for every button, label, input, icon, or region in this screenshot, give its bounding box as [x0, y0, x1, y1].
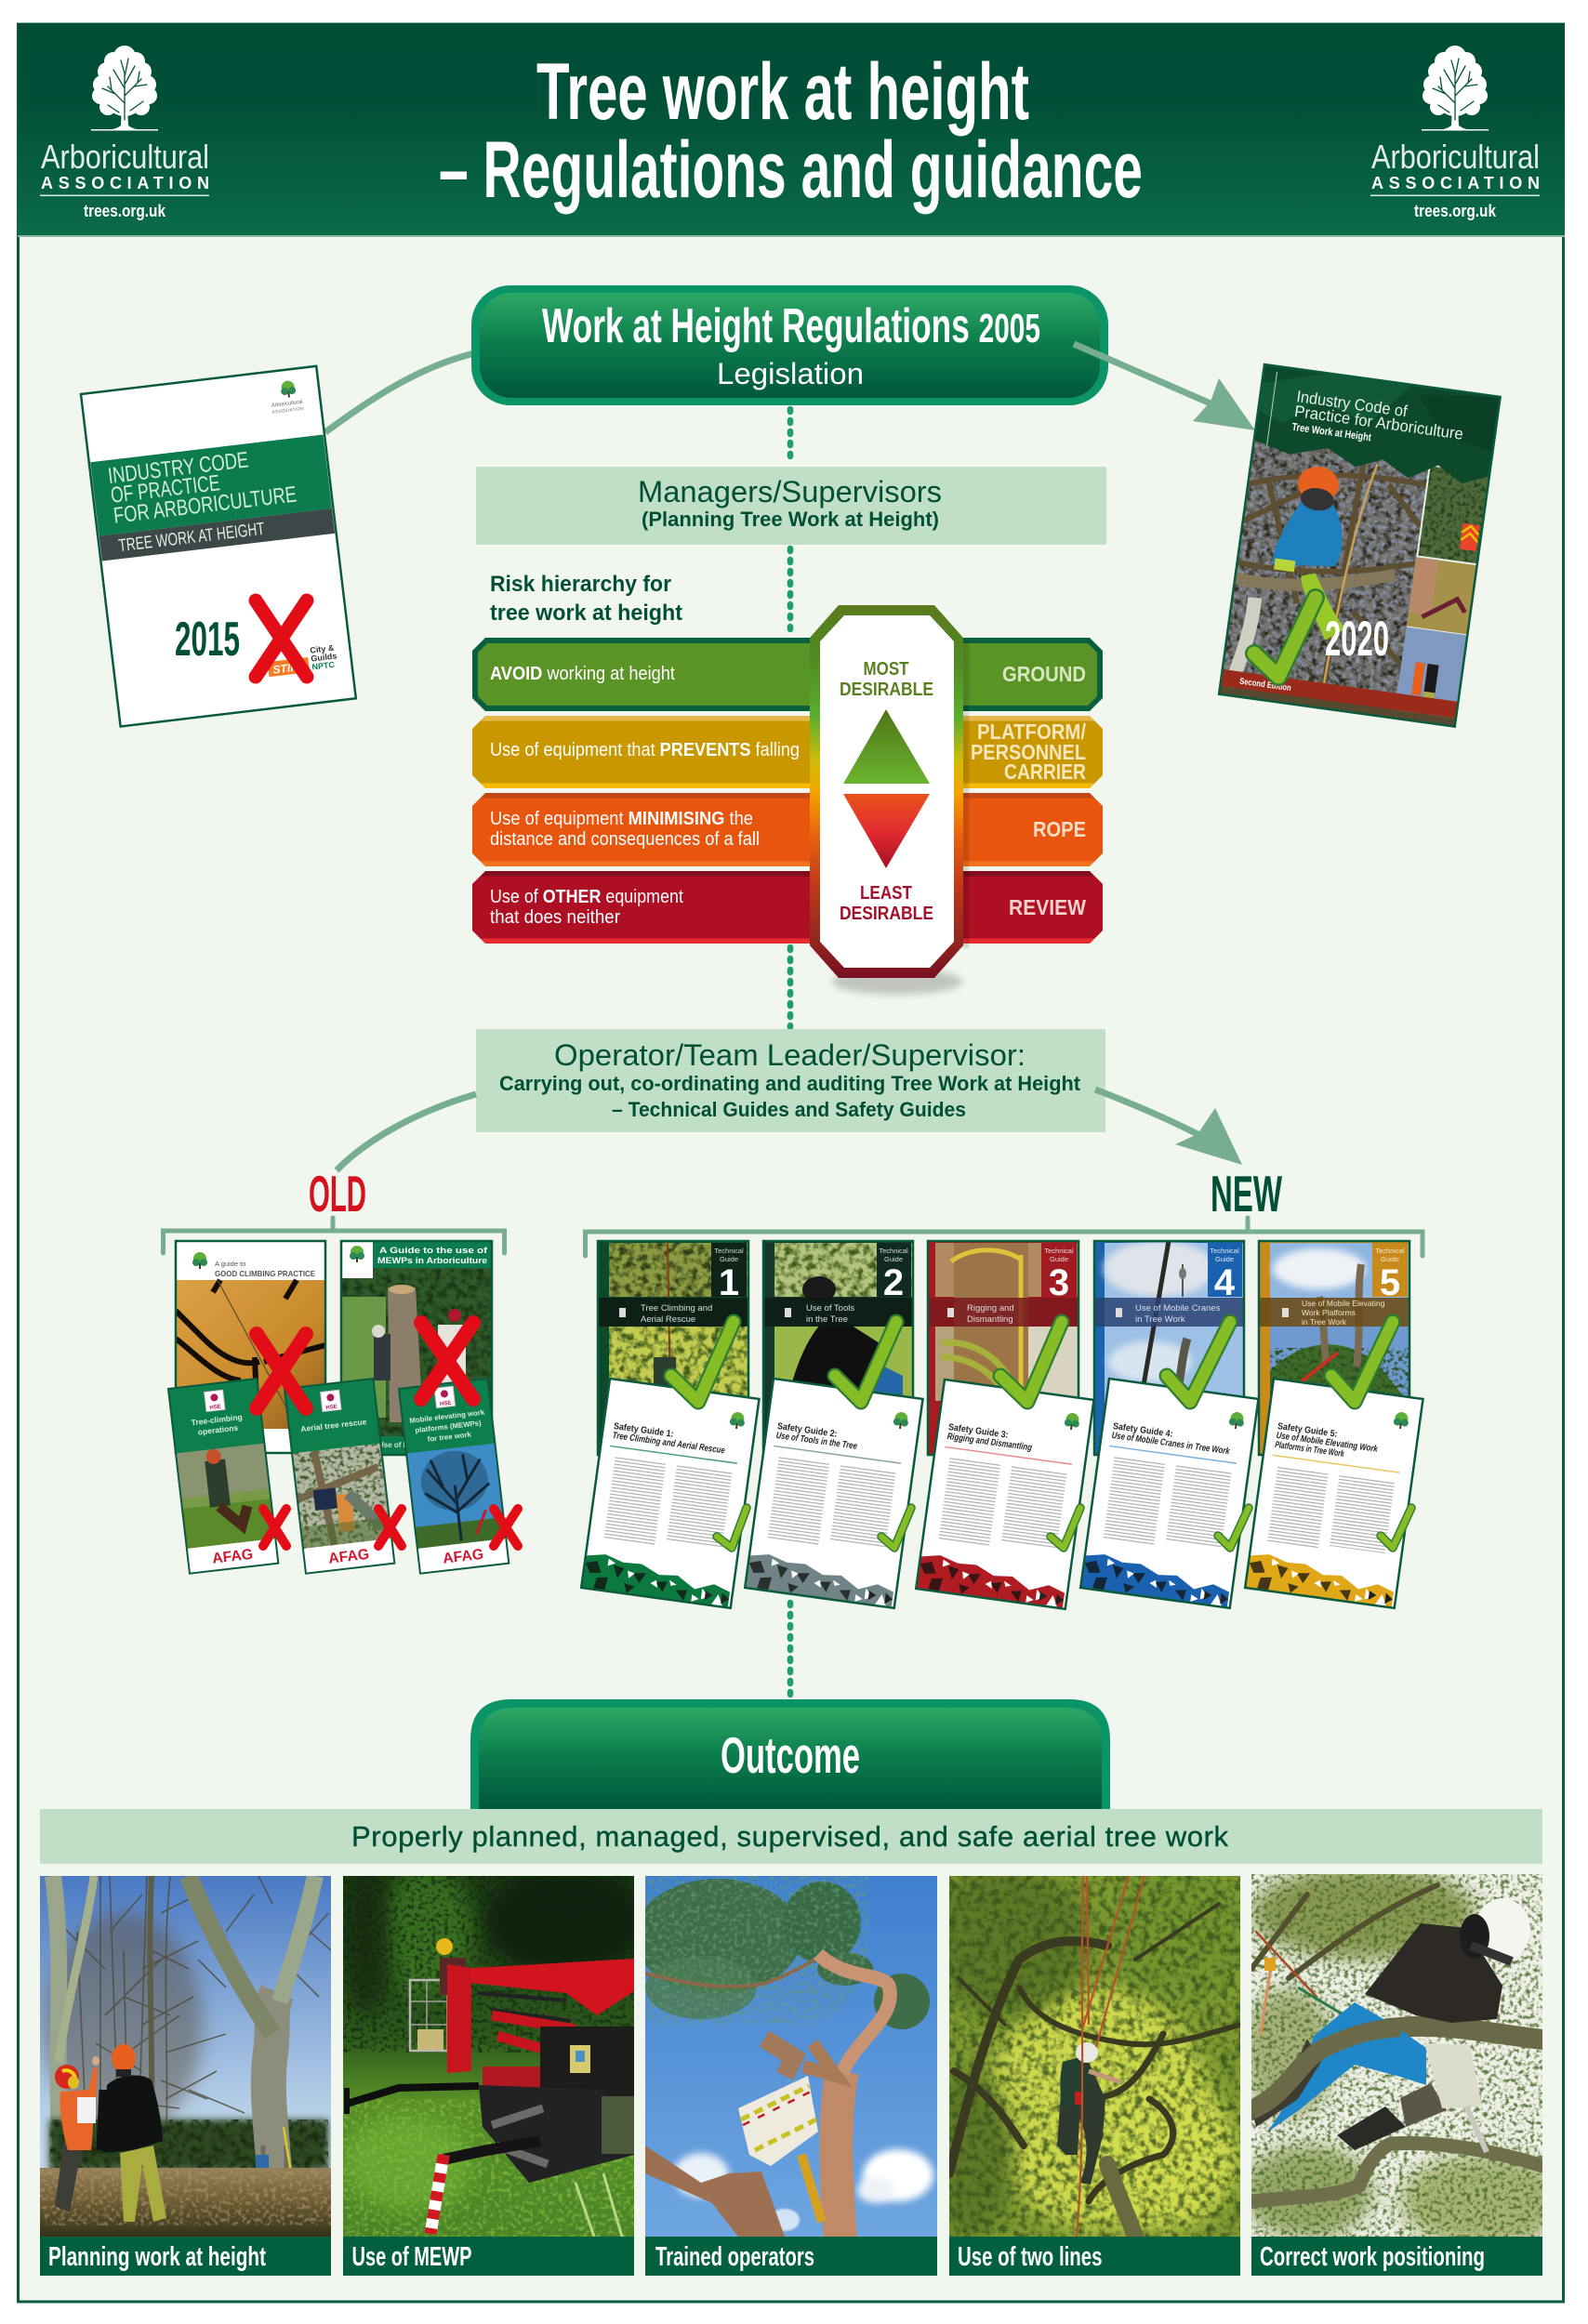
document: 2015 code of practice (old): STIHL — [272, 660, 306, 677]
cover: technical guide 2: 2 — [883, 1262, 904, 1303]
cover: technical guide 3: Guide — [1050, 1255, 1068, 1263]
panel: operator / team leader: – Technical Guides and Safety Guides — [612, 1098, 966, 1121]
cover: technical guide 3: Dismantling — [967, 1314, 1013, 1325]
cover: technical guide 2: Guide — [884, 1255, 903, 1263]
document: 2020 code of practice (current): Second Edition — [1238, 677, 1292, 693]
caption: Correct work positioning — [1260, 2242, 1485, 2272]
bracket: old — [164, 1218, 504, 1253]
sheet: safety guide 5: Platforms in Tree Work — [1275, 1440, 1345, 1459]
bar: minimising / rope: ROPE — [1033, 817, 1086, 841]
brochure: tree-climbing operations: HSE — [209, 1405, 221, 1411]
brochure: mobile elevating work platforms: AFAG — [442, 1547, 484, 1567]
caption: Use of two lines — [958, 2242, 1103, 2272]
cover: technical guide 2: Use of Tools — [806, 1303, 854, 1314]
group: new technical guides — [598, 1241, 1409, 1455]
caption — [645, 2237, 937, 2276]
bar: prevents falling / platform: PLATFORM/ — [977, 720, 1087, 744]
caption — [949, 2237, 1240, 2276]
sheet: safety guide 1 — [581, 1379, 760, 1608]
capsule: most to least desirable scale: DESIRABLE — [840, 680, 933, 700]
panel: managers / supervisors — [476, 467, 1106, 545]
cover: technical guide 1 — [598, 1241, 748, 1455]
brochure: mobile elevating work platforms: for tree work — [427, 1430, 472, 1444]
cover: technical guide 4 — [1094, 1241, 1244, 1455]
brochure: mobile elevating work platforms — [399, 1379, 509, 1574]
brochure: aerial tree rescue: Aerial tree rescue — [300, 1417, 367, 1433]
icons: small green ticks on safety guides — [717, 1508, 1411, 1548]
sheet: safety guide 5: Use of Mobile Elevating Work — [1276, 1431, 1379, 1455]
caption — [343, 2237, 634, 2276]
sheet: safety guide 3: Safety Guide 3: — [947, 1422, 1009, 1441]
document: 2015 code of practice (old): TREE WORK AT HEIGHT — [117, 520, 266, 556]
sheet: safety guide 1: Tree Climbing and Aerial Rescue — [612, 1431, 726, 1456]
cover: technical guide 5: Work Platforms — [1302, 1308, 1356, 1317]
capsule: most to least desirable scale — [810, 605, 969, 995]
cover: technical guide 1: Aerial Rescue — [641, 1314, 695, 1325]
cover: technical guide 1: 1 — [719, 1262, 739, 1303]
cover: technical guide 4: Technical — [1210, 1247, 1239, 1255]
capsule: most to least desirable scale: LEAST — [860, 883, 912, 904]
outcome statement bar: Properly planned, managed, supervised, and safe aerial tree work — [351, 1820, 1229, 1853]
group: old guidance documents — [168, 1241, 518, 1574]
doc: a guide to good climbing practice — [176, 1241, 325, 1453]
panel: legislation — [471, 285, 1108, 405]
bar: prevents falling / platform: PERSONNEL — [971, 740, 1086, 764]
cover: technical guide 3 — [928, 1241, 1079, 1455]
bracket: new — [586, 1218, 1423, 1256]
bar: minimising / rope — [472, 793, 1103, 866]
cover: technical guide 4: Guide — [1215, 1255, 1234, 1263]
icon: red crosses on old guides — [257, 1323, 473, 1408]
heading: risk hierarchy: tree work at height — [490, 601, 682, 626]
cover: technical guide 5: Technical — [1375, 1247, 1405, 1255]
document: 2015 code of practice (old): Guilds — [311, 651, 337, 664]
sheet: safety guide 5: Safety Guide 5: — [1277, 1421, 1338, 1440]
document: 2015 code of practice (old): NPTC — [311, 660, 336, 672]
bar: prevents falling / platform: CARRIER — [1004, 759, 1086, 784]
panel: outcome — [470, 1699, 1110, 1809]
sheet: safety guide 5 — [1245, 1379, 1423, 1608]
header band — [18, 23, 1565, 237]
capsule: most to least desirable scale: MOST — [863, 659, 909, 680]
document: 2020 code of practice (current): Industry Code of — [1295, 387, 1409, 420]
doc: a guide to the use of MEWPs: MEWPs in Arboriculture — [377, 1256, 487, 1266]
brochure: tree-climbing operations: operations — [197, 1423, 239, 1437]
cover: technical guide 3: Rigging and — [967, 1303, 1014, 1314]
cover: technical guide 5: Guide — [1381, 1255, 1399, 1263]
logo: Arboricultural Association left: ASSOCIATION — [41, 174, 209, 192]
bar: other equipment / review: that does neither — [490, 907, 620, 928]
sheet: safety guide 2 — [745, 1379, 923, 1608]
sheet: safety guide 3: Rigging and Dismantling — [946, 1432, 1033, 1453]
document: 2015 code of practice (old): Arboricultural — [271, 400, 303, 409]
capsule: most to least desirable scale: DESIRABLE — [840, 904, 933, 924]
arrow to new guidance — [1095, 1089, 1242, 1165]
logo: Arboricultural Association right: trees.org.uk — [1414, 202, 1497, 220]
dotted flow line — [787, 409, 793, 1697]
logo: Arboricultural Association right — [1370, 46, 1540, 220]
cover: technical guide 5 — [1259, 1241, 1409, 1455]
icon: red cross on 2015 — [256, 601, 307, 677]
title: Tree work at height — [536, 47, 1029, 137]
panel: legislation: Work at Height Regulations 2005 — [542, 299, 1040, 353]
panel: operator / team leader: Carrying out, co-ordinating and auditing Tree Work at Height — [499, 1072, 1081, 1095]
sheet: safety guide 1: Safety Guide 1: — [613, 1421, 674, 1440]
cover: technical guide 5: 5 — [1380, 1262, 1400, 1303]
bar: other equipment / review: Use of OTHER equipment — [490, 887, 683, 907]
document: 2015 code of practice (old): FOR ARBORICULTURE — [112, 482, 298, 529]
year label 2015: 2015 — [175, 613, 240, 667]
panel: operator / team leader — [476, 1029, 1105, 1132]
sheet: safety guide 4: Safety Guide 4: — [1112, 1421, 1173, 1440]
title: – Regulations and guidance — [439, 125, 1143, 215]
document: 2020 code of practice (current): Practice for Arboriculture — [1293, 402, 1464, 443]
icon: up triangle — [843, 709, 930, 784]
photo: planning work at height — [40, 1876, 331, 2276]
outcome statement bar — [40, 1809, 1542, 1864]
brochure: aerial tree rescue — [285, 1379, 394, 1574]
heading: risk hierarchy: Risk hierarchy for — [490, 572, 671, 597]
brochure: aerial tree rescue: HSE — [325, 1405, 337, 1411]
cover: technical guide 3: Technical — [1044, 1247, 1074, 1255]
icon: down triangle — [843, 794, 930, 868]
cover: technical guide 4: in Tree Work — [1135, 1314, 1185, 1325]
bar: other equipment / review: REVIEW — [1009, 895, 1086, 919]
arrow to 2020 code of practice — [1074, 344, 1255, 430]
panel: legislation: Legislation — [717, 357, 864, 390]
panel: outcome: Outcome — [721, 1726, 860, 1784]
sheet: safety guide 2: Safety Guide 2: — [776, 1421, 838, 1440]
group: new safety guides — [581, 1322, 1423, 1609]
photo: trained operators — [634, 1876, 937, 2276]
brochure: tree-climbing operations: Tree-climbing — [191, 1412, 243, 1427]
icons: small red crosses — [263, 1509, 518, 1546]
document: 2015 code of practice (old): OF PRACTICE — [110, 470, 221, 508]
cover: technical guide 2: Technical — [879, 1247, 908, 1255]
cover: technical guide 2: in the Tree — [806, 1314, 848, 1325]
sheet: safety guide 2: Use of Tools in the Tree — [775, 1431, 858, 1452]
cover: technical guide 5: in Tree Work — [1302, 1317, 1347, 1327]
cover: technical guide 4: Use of Mobile Cranes — [1135, 1303, 1221, 1314]
cover: technical guide 5: Use of Mobile Elevating — [1302, 1299, 1385, 1308]
heading: risk hierarchy — [490, 572, 682, 626]
document: 2020 code of practice (current) — [1219, 364, 1501, 727]
cover: technical guide 4: 4 — [1214, 1262, 1236, 1303]
doc: a guide to the use of MEWPs — [341, 1241, 492, 1455]
bar: avoid / ground: AVOID working at height — [490, 664, 675, 684]
cover: technical guide 1: Tree Climbing and — [641, 1303, 712, 1314]
bar: avoid / ground: GROUND — [1002, 662, 1086, 686]
logo: Arboricultural Association left: Arboricultural — [41, 138, 209, 176]
brochure: mobile elevating work platforms: platforms (MEWPs) — [415, 1419, 482, 1434]
document: 2020 code of practice (current): Tree Work at Height — [1291, 422, 1372, 443]
brochure: tree-climbing operations: AFAG — [211, 1547, 254, 1567]
icon: green tick on 2020 — [1254, 598, 1316, 677]
doc: a guide to good climbing practice: GOOD CLIMBING PRACTICE — [215, 1269, 315, 1278]
photo: correct work positioning — [1242, 1867, 1568, 2276]
connector to old guidance — [337, 1094, 476, 1170]
caption: Planning work at height — [48, 2242, 266, 2272]
sheet: safety guide 4 — [1080, 1379, 1259, 1608]
doc: a guide to good climbing practice: A guide to — [215, 1260, 245, 1268]
logo: Arboricultural Association left — [40, 46, 209, 220]
year label 2020: 2020 — [1325, 612, 1389, 667]
photo: use of two lines — [921, 1867, 1256, 2276]
caption: Use of MEWP — [351, 2242, 472, 2272]
cover: technical guide 3: 3 — [1049, 1262, 1069, 1303]
cover: technical guide 1: Guide — [720, 1255, 738, 1263]
bar: minimising / rope: distance and consequences of a fall — [490, 829, 760, 850]
brochure: tree-climbing operations — [168, 1379, 278, 1574]
brochure: mobile elevating work platforms: HSE — [440, 1401, 452, 1407]
sheet: safety guide 4: Use of Mobile Cranes in Tree Work — [1111, 1431, 1231, 1457]
bar: minimising / rope: Use of equipment MINIMISING the — [490, 809, 753, 829]
document: 2015 code of practice (old): INDUSTRY CODE — [107, 447, 250, 489]
brochure: aerial tree rescue: AFAG — [327, 1547, 370, 1567]
photo: use of MEWP — [343, 1867, 650, 2276]
connector curve to 2015 code of practice — [325, 353, 474, 432]
bar: prevents falling / platform: Use of equipment that PREVENTS falling — [490, 740, 800, 760]
panel: operator / team leader: Operator/Team Leader/Supervisor: — [554, 1038, 1026, 1072]
caption — [1251, 2237, 1542, 2276]
heading: NEW: NEW — [1211, 1165, 1282, 1222]
heading: OLD: OLD — [309, 1165, 366, 1222]
document: 2015 code of practice (old): City & — [310, 643, 335, 655]
chart: risk hierarchy bars — [472, 605, 1103, 995]
logo: Arboricultural Association right: Arboricultural — [1371, 138, 1540, 176]
brochure: mobile elevating work platforms: Mobile elevating work — [409, 1408, 485, 1425]
sheet: safety guide 3 — [916, 1380, 1094, 1609]
caption: Trained operators — [655, 2242, 814, 2272]
document: 2015 code of practice (old) — [81, 366, 356, 726]
document: 2015 code of practice (old): ASSOCIATION — [271, 406, 304, 415]
logo: Arboricultural Association right: ASSOCIATION — [1371, 174, 1540, 192]
title — [439, 47, 1143, 215]
logo: Arboricultural Association left: trees.org.uk — [84, 202, 166, 220]
doc: a guide to the use of MEWPs: A Guide to the use of — [379, 1246, 488, 1256]
icons: large green ticks on technical guides — [671, 1322, 1393, 1402]
bar: prevents falling / platform — [472, 716, 1103, 788]
panel: managers / supervisors: (Planning Tree Work at Height) — [642, 508, 939, 531]
cover: technical guide 2 — [763, 1241, 913, 1455]
panel: managers / supervisors: Managers/Supervisors — [638, 475, 942, 508]
cover: technical guide 1: Technical — [714, 1247, 744, 1255]
bar: other equipment / review — [472, 871, 1103, 944]
bar: avoid / ground — [472, 638, 1103, 711]
doc: a guide to the use of MEWPs: Use of MEWPs — [378, 1441, 431, 1449]
